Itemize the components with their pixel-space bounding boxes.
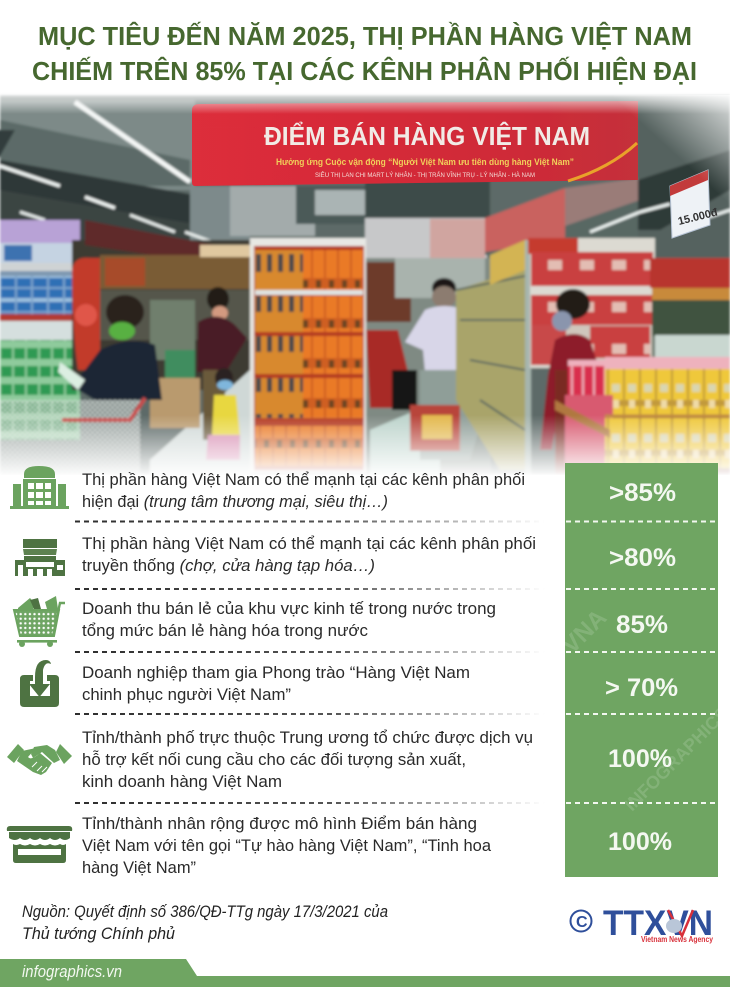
right back [652, 260, 730, 370]
source note [22, 902, 388, 943]
title: CHIẾM TRÊN 85% TẠI CÁC KÊNH PHÂN PHỐI HIỆN ĐẠI [32, 56, 697, 86]
price sign [670, 170, 719, 238]
row 4: enterprises [20, 660, 678, 707]
text: row 1: Thị phần hàng Việt Nam có thể mạnh tại các kênh phân phối [82, 471, 525, 489]
icon: inbox down arrow [20, 660, 59, 707]
text: row 1: hiện đại (trung tâm thương mại, siêu thị…) [82, 493, 388, 511]
left shelf [0, 220, 80, 245]
value: 100%: 100% [608, 745, 672, 773]
source note: Thủ tướng Chính phủ [22, 924, 176, 943]
watermark: VNA [557, 604, 612, 659]
logo: TTXVN: TTXVN [603, 904, 713, 943]
footer band [0, 959, 730, 987]
text: row 6 [82, 815, 492, 877]
child [215, 368, 233, 388]
icon: awning shop [7, 826, 72, 863]
text: row 6: hàng Việt Nam” [82, 859, 196, 877]
woman in red [556, 289, 590, 319]
title [32, 21, 697, 86]
row 2: traditional channels [15, 535, 676, 576]
text: row 2 [82, 535, 536, 575]
store sign: Điểm bán hàng Việt Nam: ĐIỂM BÁN HÀNG VIỆT NAM [264, 121, 590, 151]
text: row 2: truyền thống (chợ, cửa hàng tạp hóa…) [82, 557, 375, 575]
row 6: provinces replicating model [7, 815, 672, 877]
store sign: Điểm bán hàng Việt Nam: Hưởng ứng Cuộc vận động “Người Việt Nam ưu tiên dùng hàng Việt Nam” [276, 157, 574, 167]
red banner stand [72, 258, 100, 370]
photo fades [0, 90, 730, 485]
red + yellow bottles [555, 370, 730, 475]
value: 100%: 100% [608, 828, 672, 856]
text: row 5: Tỉnh/thành phố trực thuộc Trung ương tổ chức được dịch vụ [82, 729, 533, 747]
aisle [366, 258, 491, 473]
text: row 4 [82, 664, 470, 704]
text: row 2: Thị phần hàng Việt Nam có thể mạnh tại các kênh phân phối [82, 535, 536, 553]
icon: market stall [15, 539, 65, 576]
row 3: retail revenue [14, 596, 668, 647]
value: >80%: >80% [609, 544, 676, 572]
text: row 1 [82, 471, 525, 511]
value: 85%: 85% [616, 611, 668, 639]
icon: handshake [7, 744, 72, 775]
text: row 4: chinh phục người Việt Nam” [82, 686, 291, 704]
photo: supermarket aisle with shoppers [0, 90, 730, 485]
woman left [106, 295, 144, 329]
logo: TTXVN: C [576, 914, 588, 931]
icon: shopping mall [10, 466, 69, 509]
text: row 3: Doanh thu bán lẻ của khu vực kinh tế trong nước trong [82, 600, 496, 618]
row 1: modern channels [10, 466, 676, 511]
text: row 6: Tỉnh/thành nhân rộng được mô hình Điểm bán hàng [82, 815, 477, 833]
store sign: Điểm bán hàng Việt Nam [192, 101, 638, 186]
top right ceiling [638, 100, 730, 270]
logo: TTXVN: Vietnam News Agency [641, 934, 713, 944]
center shelf [250, 238, 366, 473]
title: MỤC TIÊU ĐẾN NĂM 2025, THỊ PHẦN HÀNG VIỆT NAM [38, 21, 692, 51]
text: row 5 [82, 729, 533, 791]
text: row 5: hỗ trợ kết nối cung cầu cho các đối tượng sản xuất, [82, 750, 466, 769]
mid shelf [72, 240, 252, 390]
text: row 3: tổng mức bán lẻ hàng hóa trong nước [82, 622, 368, 640]
row dividers [75, 522, 545, 803]
value: >85%: >85% [609, 479, 676, 507]
text: row 3 [82, 600, 496, 640]
text: row 5: kinh doanh hàng Việt Nam [82, 773, 282, 791]
price sign: 15.000đ [677, 206, 719, 228]
value: >70%: > 70% [605, 674, 678, 702]
watermark [557, 604, 730, 815]
watermark: INFOGRAPHICS [621, 703, 730, 815]
row 5: provinces with supply-demand services [7, 729, 672, 791]
man mid [207, 287, 229, 311]
source note: Nguồn: Quyết định số 386/QĐ-TTg ngày 17/3/2021 của [22, 902, 388, 921]
right aisle shelves [456, 268, 525, 470]
icon: shopping cart [14, 596, 65, 647]
footer text: infographics.vn [22, 962, 122, 981]
shopping cart left [0, 400, 140, 475]
panel: value column [565, 463, 718, 877]
text: row 6: Việt Nam với tên gọi “Tự hào hàng Việt Nam”, “Tinh hoa [82, 837, 492, 855]
man with cart [432, 278, 456, 298]
floor [150, 370, 250, 480]
store sign: Điểm bán hàng Việt Nam: SIÊU THỊ LAN CHI MART LÝ NHÂN - THỊ TRẤN VĨNH TRỤ - LÝ NHÂN - HÀ NAM [315, 169, 535, 179]
back wall [365, 180, 490, 218]
text: row 4: Doanh nghiệp tham gia Phong trào “Hàng Việt Nam [82, 664, 470, 682]
red products shelf [530, 238, 655, 368]
